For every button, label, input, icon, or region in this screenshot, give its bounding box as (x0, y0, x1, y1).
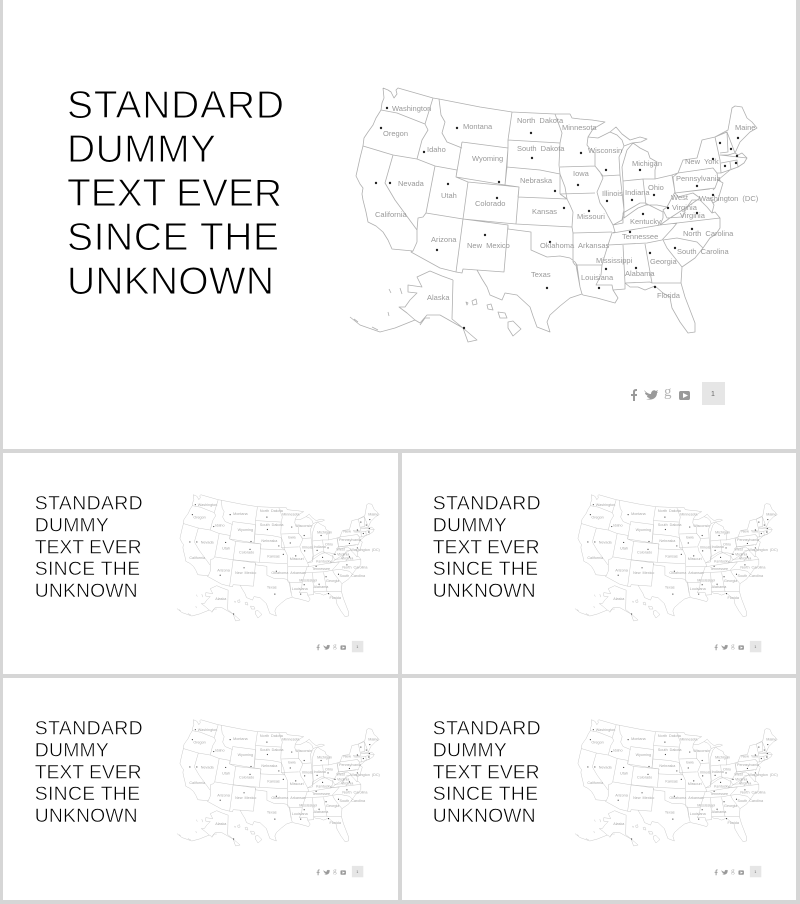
map of the United States: Alaska (427, 293, 450, 302)
map of the United States: Ohio (648, 183, 664, 192)
map of the United States: Missouri (688, 782, 702, 786)
map of the United States: Kansas (532, 207, 557, 216)
map of the United States: Montana (233, 512, 249, 516)
map of the United States: Wisconsin (693, 749, 710, 753)
map of the United States: Wyoming (636, 753, 651, 757)
map of the United States: Kansas (665, 779, 678, 783)
map of the United States: Tennessee (710, 567, 728, 571)
title: DUMMY (35, 515, 109, 537)
map of the United States: Nevada (201, 540, 215, 544)
map of the United States: Mississippi (697, 804, 715, 808)
map of the United States: Iowa (288, 535, 297, 539)
map of the United States: Washington (596, 728, 615, 732)
map of the United States: Indiana (712, 770, 725, 774)
map of the United States: West (336, 547, 345, 551)
title: SINCE THE (433, 783, 538, 805)
social icons and page number (715, 641, 761, 652)
map of the United States: California (587, 556, 604, 560)
map of the United States: Washington (DC) (350, 548, 380, 552)
map of the United States: Alabama (314, 810, 329, 814)
map of the United States: Missouri (290, 782, 304, 786)
map of the United States: North Carolina (342, 565, 368, 569)
map of the United States: Colorado (637, 550, 652, 554)
map of the United States: Illinois (700, 545, 711, 549)
map of the United States: Wyoming (472, 154, 503, 163)
map of the United States: Nevada (201, 765, 215, 769)
map of the United States: Alaska (613, 822, 625, 826)
title (433, 493, 541, 602)
map of the United States: Arkansas (688, 796, 704, 800)
social icons and page number: g (731, 866, 735, 875)
map of the United States: West (734, 772, 743, 776)
map of the United States: Nebraska (659, 764, 676, 768)
map of the United States: Nebraska (520, 176, 553, 185)
map of the United States: Nevada (599, 765, 613, 769)
map of the United States: South Dakota (260, 748, 284, 752)
map of the United States: Nebraska (659, 539, 676, 543)
title: STANDARD (433, 493, 541, 515)
map of the United States: Utah (620, 771, 628, 775)
title (67, 84, 284, 303)
social icons and page number: 1 (356, 645, 358, 649)
map of the United States: Idaho (215, 749, 225, 753)
social icons and page number: g (333, 641, 337, 650)
map of the United States: Nevada (398, 179, 425, 188)
map of the United States: Oregon (591, 516, 604, 520)
title: DUMMY (35, 740, 109, 762)
map of the United States: New York (741, 530, 758, 534)
map of the United States: Wisconsin (295, 749, 312, 753)
map of the United States: Minnesota (282, 738, 300, 742)
map of the United States: Wyoming (238, 528, 253, 532)
map of the United States: Louisiana (292, 587, 309, 591)
social icons and page number: g (731, 641, 735, 650)
map of the United States: North Dakota (658, 734, 682, 738)
title: SINCE THE (433, 558, 538, 580)
title: STANDARD (67, 84, 284, 127)
social icons and page number (317, 866, 363, 877)
map of the United States: Arizona (615, 568, 629, 572)
map of the United States: Pennsylvania (339, 763, 362, 767)
title: SINCE THE (35, 783, 140, 805)
map of the United States: Illinois (302, 545, 313, 549)
map of the United States: Alaska (215, 597, 227, 601)
map of the United States: North Dakota (260, 734, 284, 738)
title: DUMMY (433, 515, 507, 537)
map of the United States: Kentucky (316, 784, 332, 788)
map of the United States: Georgia (650, 257, 678, 266)
map of the United States: Utah (620, 546, 628, 550)
map of the United States: Nebraska (261, 539, 278, 543)
map of the United States: Colorado (239, 550, 254, 554)
map of the United States: Georgia (724, 579, 738, 583)
map of the United States: Tennessee (312, 567, 330, 571)
title: DUMMY (67, 128, 216, 171)
map of the United States: Texas (267, 811, 277, 815)
title: TEXT EVER (433, 761, 540, 783)
map of the United States: Montana (463, 122, 493, 131)
map of the United States: California (189, 556, 206, 560)
map of the United States: New Mexico (235, 796, 256, 800)
map of the United States: Arkansas (290, 571, 306, 575)
map of the United States: Louisiana (292, 812, 309, 816)
map of the United States: Washington (DC) (748, 548, 778, 552)
map of the United States: Kentucky (714, 784, 730, 788)
map of the United States: Michigan (317, 756, 332, 760)
title: TEXT EVER (35, 761, 142, 783)
title: UNKNOWN (433, 805, 536, 827)
map of the United States: Maine (368, 513, 378, 517)
map of the United States: Indiana (625, 188, 650, 197)
map of the United States: Kentucky (316, 559, 332, 563)
map of the United States: North Carolina (740, 565, 766, 569)
map of the United States: Virginia (341, 781, 354, 785)
map of the United States: South Carolina (339, 574, 366, 578)
map of the United States: Oregon (383, 129, 408, 138)
map of the United States: Ohio (723, 767, 731, 771)
social icons and page number (715, 866, 761, 877)
map of the United States: New York (741, 755, 758, 759)
map of the United States: Florida (657, 291, 681, 300)
map of the United States: Idaho (613, 749, 623, 753)
map of the United States: Wyoming (636, 528, 651, 532)
map of the United States: Alaska (613, 597, 625, 601)
map of the United States: Washington (392, 104, 431, 113)
map of the United States: Missouri (688, 557, 702, 561)
map of the United States: Alabama (314, 585, 329, 589)
map of the United States: Alabama (625, 269, 655, 278)
map of the United States: New York (685, 157, 719, 166)
map of the United States: South Dakota (260, 523, 284, 527)
map of the United States (575, 720, 778, 846)
panel: slide bottom right (402, 678, 796, 900)
map of the United States: North Carolina (683, 229, 734, 238)
map of the United States (177, 495, 380, 621)
map of the United States: South Carolina (737, 799, 764, 803)
map of the United States: Georgia (724, 804, 738, 808)
map of the United States (575, 495, 778, 621)
map of the United States: Texas (531, 270, 551, 279)
map of the United States: Texas (665, 811, 675, 815)
map of the United States: Mississippi (697, 579, 715, 583)
title: SINCE THE (35, 558, 140, 580)
map of the United States: Arizona (431, 235, 457, 244)
map of the United States: Maine (766, 513, 776, 517)
map of the United States: North Carolina (740, 790, 766, 794)
map of the United States: Utah (441, 191, 457, 200)
map of the United States: Virginia (680, 211, 706, 220)
title (433, 718, 541, 827)
map of the United States: Missouri (577, 212, 605, 221)
map of the United States: South Dakota (658, 748, 682, 752)
map of the United States: New York (343, 755, 360, 759)
map of the United States: Tennessee (622, 232, 658, 241)
map of the United States: Michigan (317, 531, 332, 535)
map of the United States: Kentucky (714, 559, 730, 563)
map of the United States: Maine (766, 738, 776, 742)
map of the United States: Montana (631, 737, 647, 741)
map of the United States: Pennsylvania (339, 538, 362, 542)
map of the United States: California (375, 210, 408, 219)
title: SINCE THE (67, 216, 279, 259)
map of the United States: Indiana (712, 545, 725, 549)
map of the United States: Indiana (314, 545, 327, 549)
map of the United States: Iowa (686, 535, 695, 539)
title: STANDARD (433, 718, 541, 740)
map of the United States: Oklahoma (669, 571, 687, 575)
map of the United States: Wisconsin (295, 524, 312, 528)
map of the United States: Kansas (267, 554, 280, 558)
map of the United States (350, 88, 759, 342)
map of the United States: Virginia (337, 552, 350, 556)
map of the United States: Iowa (573, 169, 590, 178)
social icons and page number (631, 382, 725, 405)
map of the United States: Mississippi (299, 579, 317, 583)
social icons and page number: 1 (711, 391, 715, 398)
map of the United States: Minnesota (562, 123, 597, 132)
map of the United States: Illinois (302, 770, 313, 774)
map of the United States: Mississippi (596, 256, 633, 265)
title: DUMMY (433, 740, 507, 762)
map of the United States: Minnesota (680, 513, 698, 517)
map of the United States: Oklahoma (271, 796, 289, 800)
map of the United States: Indiana (314, 770, 327, 774)
title: TEXT EVER (67, 172, 282, 215)
map of the United States: California (189, 781, 206, 785)
map of the United States: Michigan (715, 531, 730, 535)
map of the United States: Georgia (326, 579, 340, 583)
map of the United States: Arkansas (578, 241, 610, 250)
map of the United States: Ohio (325, 767, 333, 771)
map of the United States: Mississippi (299, 804, 317, 808)
map of the United States: Idaho (613, 524, 623, 528)
title: UNKNOWN (67, 260, 274, 303)
map of the United States: Minnesota (680, 738, 698, 742)
map of the United States: West (734, 547, 743, 551)
map of the United States: Minnesota (282, 513, 300, 517)
map of the United States: Nevada (599, 540, 613, 544)
map of the United States: Alabama (712, 810, 727, 814)
social icons and page number: g (664, 384, 672, 400)
map of the United States: Arkansas (688, 571, 704, 575)
map of the United States: Kansas (665, 554, 678, 558)
map of the United States (177, 720, 380, 846)
panel: slide bottom left (3, 678, 398, 900)
title: STANDARD (35, 718, 143, 740)
map of the United States: Montana (233, 737, 249, 741)
map of the United States: Florida (330, 821, 342, 825)
map of the United States: Idaho (215, 524, 225, 528)
map of the United States: North Dakota (658, 509, 682, 513)
title: STANDARD (35, 493, 143, 515)
title: UNKNOWN (35, 805, 138, 827)
map of the United States: Nebraska (261, 764, 278, 768)
map of the United States: Utah (222, 546, 230, 550)
title (35, 493, 143, 602)
map of the United States: Arizona (615, 793, 629, 797)
map of the United States: Virginia (735, 777, 748, 781)
map of the United States: Oklahoma (271, 571, 289, 575)
title: UNKNOWN (433, 580, 536, 602)
map of the United States: Alabama (712, 585, 727, 589)
map of the United States: Wyoming (238, 753, 253, 757)
map of the United States: Washington (DC) (699, 194, 759, 203)
map of the United States: Iowa (288, 760, 297, 764)
map of the United States: Florida (330, 596, 342, 600)
map of the United States: Arizona (217, 568, 231, 572)
map of the United States: South Carolina (677, 247, 729, 256)
map of the United States: Louisiana (581, 273, 614, 282)
map of the United States: Virginia (672, 203, 698, 212)
map of the United States: Oklahoma (540, 241, 575, 250)
map of the United States: Arkansas (290, 796, 306, 800)
map of the United States: New Mexico (633, 571, 654, 575)
map of the United States: West (671, 193, 689, 202)
map of the United States: New Mexico (633, 796, 654, 800)
map of the United States: Montana (631, 512, 647, 516)
map of the United States: Michigan (715, 756, 730, 760)
title (35, 718, 143, 827)
social icons and page number: g (333, 866, 337, 875)
map of the United States: Colorado (637, 775, 652, 779)
map of the United States: North Dakota (517, 116, 564, 125)
map of the United States: Virginia (739, 556, 752, 560)
map of the United States: West (336, 772, 345, 776)
map of the United States: North Dakota (260, 509, 284, 513)
map of the United States: Arizona (217, 793, 231, 797)
map of the United States: Virginia (341, 556, 354, 560)
title: UNKNOWN (35, 580, 138, 602)
map of the United States: Missouri (290, 557, 304, 561)
map of the United States: Oklahoma (669, 796, 687, 800)
title: TEXT EVER (433, 536, 540, 558)
map of the United States: Illinois (602, 189, 623, 198)
map of the United States: Oregon (591, 741, 604, 745)
panel: slide top left (3, 453, 398, 674)
title: TEXT EVER (35, 536, 142, 558)
map of the United States: Wisconsin (588, 146, 622, 155)
map of the United States: Wisconsin (693, 524, 710, 528)
map of the United States: South Carolina (737, 574, 764, 578)
map of the United States: Virginia (337, 777, 350, 781)
map of the United States: Pennsylvania (737, 763, 760, 767)
map of the United States: Michigan (632, 159, 662, 168)
social icons and page number (317, 641, 363, 652)
map of the United States: Washington (198, 503, 217, 507)
map of the United States: Pennsylvania (737, 538, 760, 542)
map of the United States: Idaho (427, 145, 446, 154)
map of the United States: Iowa (686, 760, 695, 764)
social icons and page number: 1 (754, 870, 756, 874)
map of the United States: South Carolina (339, 799, 366, 803)
map of the United States: Colorado (239, 775, 254, 779)
map of the United States: Kansas (267, 779, 280, 783)
map of the United States: New York (343, 530, 360, 534)
map of the United States: Oregon (193, 741, 206, 745)
map of the United States: Tennessee (312, 792, 330, 796)
map of the United States: Texas (267, 586, 277, 590)
map of the United States: Maine (368, 738, 378, 742)
map of the United States: South Dakota (658, 523, 682, 527)
map of the United States: Tennessee (710, 792, 728, 796)
map of the United States: Colorado (475, 199, 505, 208)
map of the United States: New Mexico (467, 241, 510, 250)
map of the United States: Kentucky (630, 217, 661, 226)
map of the United States: Texas (665, 586, 675, 590)
panel: main slide (3, 0, 796, 449)
map of the United States: Ohio (723, 542, 731, 546)
social icons and page number: 1 (356, 870, 358, 874)
map of the United States: Ohio (325, 542, 333, 546)
panel: slide top right (402, 453, 796, 674)
map of the United States: Washington (198, 728, 217, 732)
map of the United States: Virginia (739, 781, 752, 785)
map of the United States: Illinois (700, 770, 711, 774)
map of the United States: Oregon (193, 516, 206, 520)
map of the United States: Virginia (735, 552, 748, 556)
map of the United States: Washington (DC) (350, 773, 380, 777)
map of the United States: New Mexico (235, 571, 256, 575)
map of the United States: Florida (728, 821, 740, 825)
social icons and page number: 1 (754, 645, 756, 649)
map of the United States: Alaska (215, 822, 227, 826)
map of the United States: Georgia (326, 804, 340, 808)
map of the United States: Florida (728, 596, 740, 600)
map of the United States: Utah (222, 771, 230, 775)
map of the United States: Washington (596, 503, 615, 507)
map of the United States: Louisiana (690, 587, 707, 591)
map of the United States: Washington (DC) (748, 773, 778, 777)
map of the United States: North Carolina (342, 790, 368, 794)
map of the United States: Louisiana (690, 812, 707, 816)
map of the United States: South Dakota (517, 144, 565, 153)
map of the United States: Pennsylvania (676, 174, 721, 183)
map of the United States: California (587, 781, 604, 785)
map of the United States: Maine (735, 123, 755, 132)
